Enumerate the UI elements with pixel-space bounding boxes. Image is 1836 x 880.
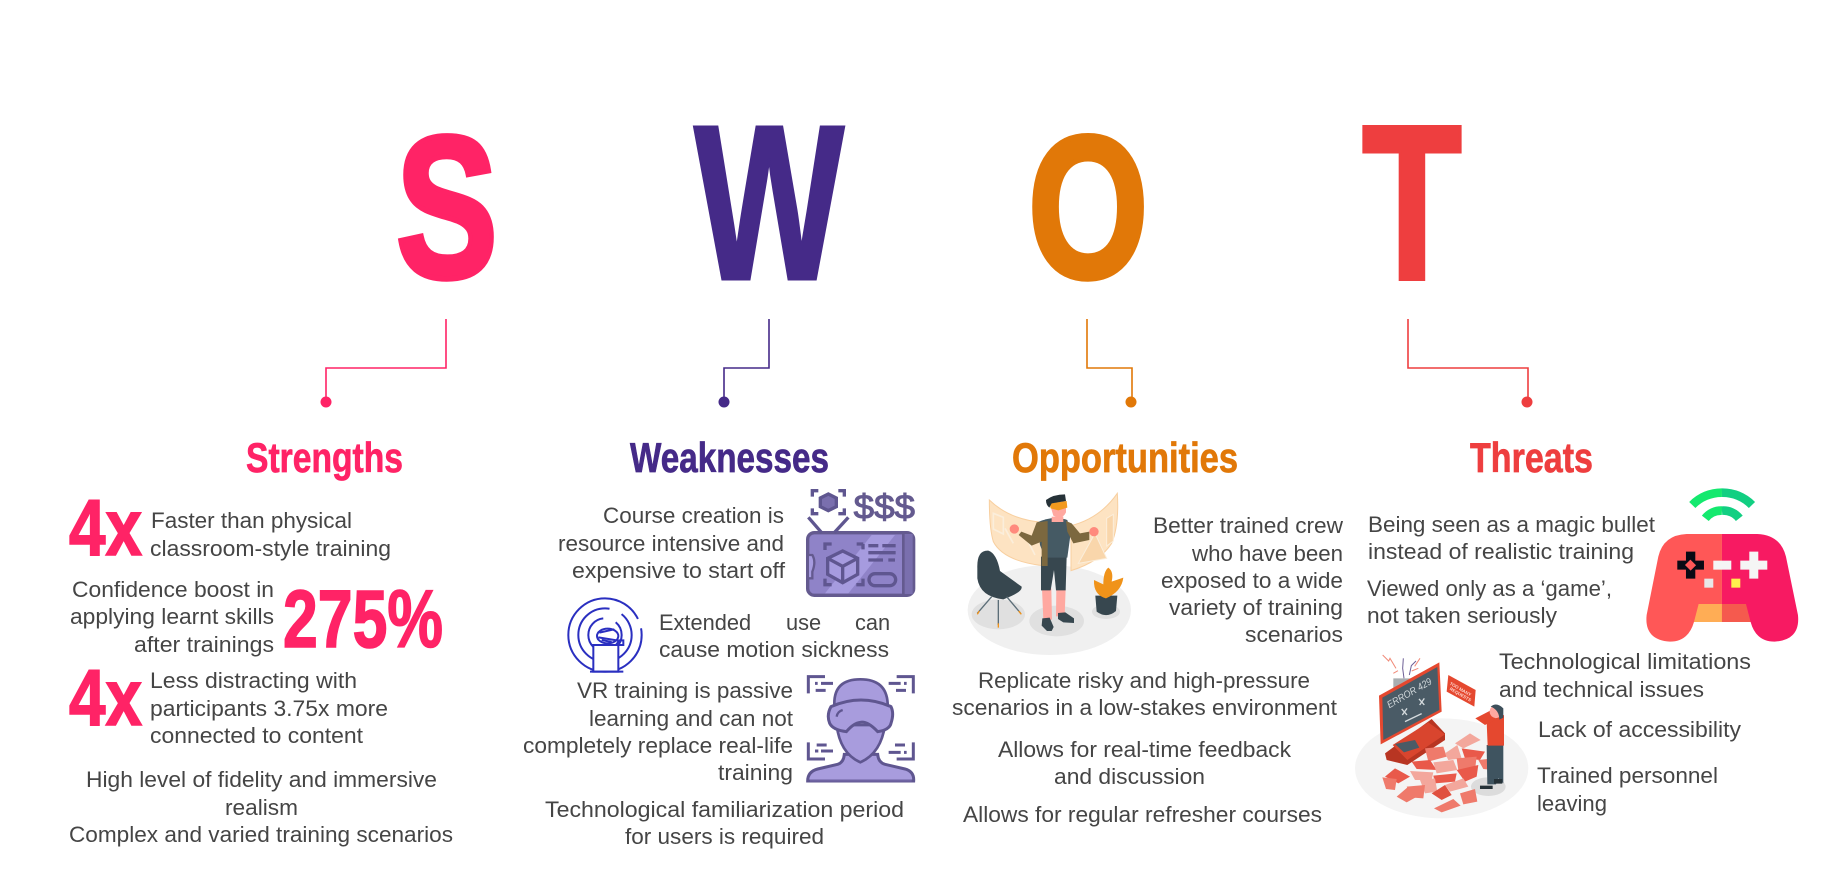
- heading: Threats: Threats: [1470, 434, 1593, 481]
- title letter S: S: [396, 94, 498, 320]
- text: confidence boost: applying learnt skills: [70, 604, 274, 629]
- text: less distracting: connected to content: [150, 723, 363, 748]
- text: extended use: use: [786, 610, 821, 635]
- panel: opportunities: [952, 434, 1343, 827]
- connector: T to Threats: [1408, 319, 1532, 408]
- text: better trained crew: scenarios: [1245, 622, 1343, 647]
- text: extended use: [659, 610, 890, 662]
- text: fidelity and scenarios: [69, 767, 453, 847]
- illustration: error 429: TOO MANY: [1449, 681, 1472, 697]
- stat: 275%: 275%: [283, 574, 443, 665]
- text: magic bullet: Being seen as a magic bullet: [1368, 512, 1655, 537]
- connector: S to Strengths: [320, 319, 446, 408]
- text: course creation: expensive to start off: [572, 558, 786, 583]
- text: viewed as a game: not taken seriously: [1367, 603, 1557, 628]
- illustration: error 429: ERROR 429: [1385, 676, 1434, 711]
- panel: strengths: [69, 434, 453, 847]
- text: fidelity and scenarios: Complex and varied training scenarios: [69, 822, 453, 847]
- text: passive learning: [523, 678, 793, 785]
- text: passive learning: training: [718, 760, 793, 785]
- text: fidelity and scenarios: High level of fidelity and immersive: [86, 767, 437, 792]
- text: extended use: can: [855, 610, 890, 635]
- text: course creation: resource intensive and: [558, 531, 784, 556]
- text: passive learning: completely replace real-life: [523, 733, 793, 758]
- text: lack of accessibility: Lack of accessibility: [1538, 717, 1741, 742]
- illustration: error 429: [1355, 655, 1528, 818]
- text: familiarization period: Technological familiarization period: [545, 797, 904, 822]
- text: better trained crew: exposed to a wide: [1161, 568, 1343, 593]
- icon: VR headset user: [808, 677, 914, 782]
- text: technological limitations: Technological limitations: [1499, 649, 1751, 674]
- text: trained personnel leaving: leaving: [1537, 791, 1607, 816]
- title letter W: W: [694, 79, 844, 326]
- text: faster than classroom: classroom-style training: [150, 536, 391, 561]
- text: confidence boost: after trainings: [134, 632, 274, 657]
- stat: 4x less distracting: 4x: [69, 653, 142, 742]
- text: better trained crew: Better trained crew: [1153, 513, 1343, 538]
- text: magic bullet: [1368, 512, 1655, 564]
- illustration: person using VR: [968, 493, 1131, 655]
- text: refresher courses: Allows for regular refresher courses: [963, 802, 1322, 827]
- text: real-time feedback: Allows for real-time feedback: [998, 737, 1291, 762]
- text: extended use: Extended: [659, 610, 751, 635]
- text: fidelity and scenarios: realism: [225, 795, 298, 820]
- text: better trained crew: variety of training: [1169, 595, 1343, 620]
- heading: Weaknesses: Weaknesses: [630, 434, 829, 481]
- text: confidence boost: [70, 577, 274, 657]
- illustration: error 429: REQUESTS: [1449, 686, 1472, 703]
- text: familiarization period: [545, 797, 904, 849]
- connector: W to Weaknesses: [718, 319, 769, 408]
- title letter O: O: [1028, 95, 1148, 321]
- title letter T: T: [1362, 80, 1462, 327]
- text: less distracting: participants 3.75x more: [150, 696, 388, 721]
- text: technological limitations: [1499, 649, 1751, 702]
- text: faster than classroom: [150, 508, 391, 561]
- heading: Strengths: Strengths: [246, 434, 403, 481]
- text: technological limitations: and technical issues: [1499, 677, 1704, 702]
- text: course creation: [558, 503, 786, 583]
- text: trained personnel leaving: Trained personnel: [1537, 763, 1718, 788]
- text: extended use: cause motion sickness: [659, 637, 889, 662]
- text: replicate risky scenarios: scenarios in a low-stakes environment: [952, 695, 1337, 720]
- text: passive learning: VR training is passive: [577, 678, 793, 703]
- text: familiarization period: for users is required: [625, 824, 824, 849]
- text: less distracting: Less distracting with: [150, 668, 357, 693]
- text: replicate risky scenarios: Replicate risky and high-pressure: [978, 668, 1310, 693]
- icon: 3D card with dollars: $$$: [854, 488, 915, 526]
- text: confidence boost: Confidence boost in: [72, 577, 274, 602]
- panel: threats: [1355, 434, 1798, 818]
- text: better trained crew: [1153, 513, 1343, 647]
- icon: 3D card with dollars: [808, 488, 915, 595]
- text: replicate risky scenarios: [952, 668, 1337, 720]
- text: viewed as a game: Viewed only as a ‘game’,: [1367, 576, 1612, 601]
- connector: O to Opportunities: [1087, 319, 1136, 408]
- text: trained personnel leaving: [1537, 763, 1718, 816]
- text: course creation: Course creation is: [603, 503, 784, 528]
- icon: motion sickness VR circles: [568, 598, 642, 672]
- heading: Opportunities: Opportunities: [1012, 434, 1238, 481]
- text: real-time feedback: and discussion: [1054, 764, 1205, 789]
- stat: 4x faster: 4x: [69, 483, 142, 572]
- text: less distracting: [150, 668, 388, 748]
- panel: weaknesses: [523, 434, 915, 849]
- text: real-time feedback: [998, 737, 1291, 789]
- text: passive learning: learning and can not: [589, 706, 793, 731]
- icon: game controller: [1646, 493, 1798, 642]
- text: magic bullet: instead of realistic training: [1368, 539, 1634, 564]
- text: faster than classroom: Faster than physical: [151, 508, 352, 533]
- text: viewed as a game: [1367, 576, 1612, 628]
- text: better trained crew: who have been: [1191, 541, 1343, 566]
